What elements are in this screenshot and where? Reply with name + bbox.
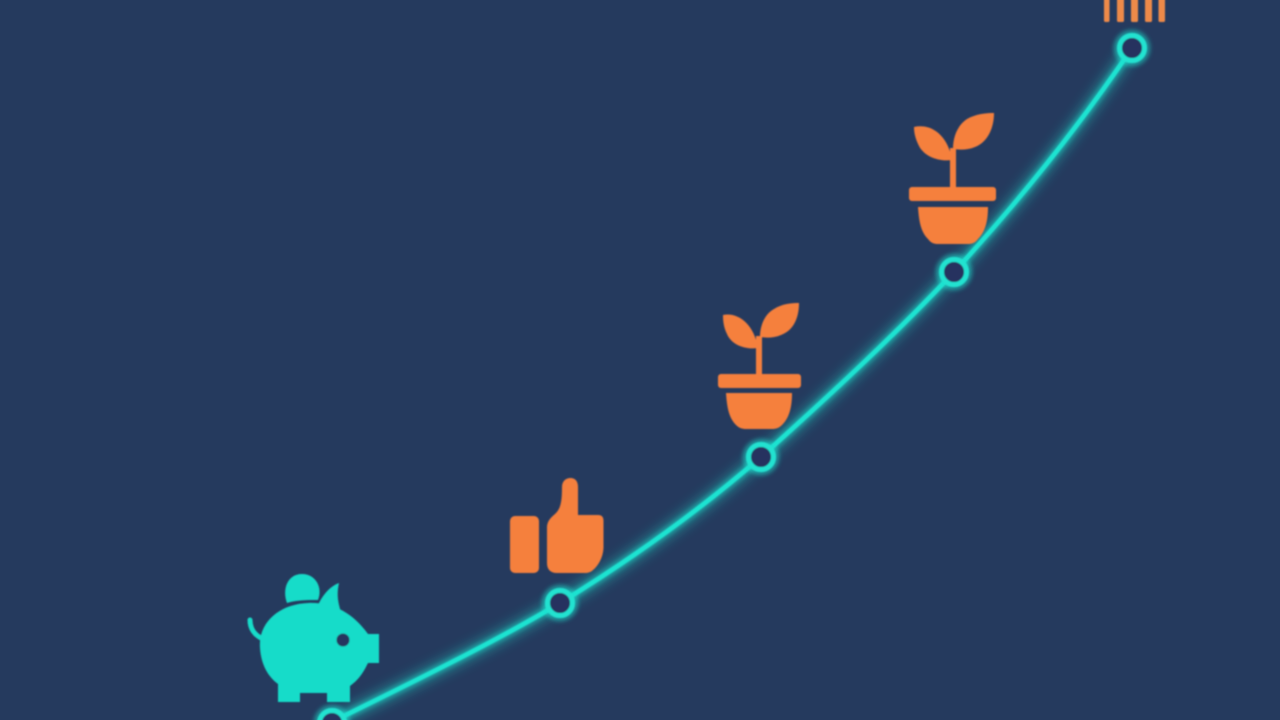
right leaf (760, 303, 799, 338)
pot body (726, 393, 792, 429)
right leaf (953, 113, 994, 150)
icon: thumbs up (510, 478, 604, 573)
body (260, 603, 379, 702)
pot rim (718, 374, 801, 388)
stem (756, 336, 762, 376)
tail (250, 620, 263, 639)
icon: piggy bank (250, 574, 379, 702)
icon: potted sprout large (909, 113, 996, 244)
ear (318, 583, 341, 612)
icon: potted sprout small (718, 303, 801, 429)
icon: cropped orange bars at top (1104, 0, 1165, 22)
pot body (918, 207, 988, 244)
left leaf (723, 315, 758, 348)
left leaf (914, 126, 952, 160)
coin (285, 574, 320, 603)
stem (950, 148, 956, 188)
curve nodes (319, 35, 1145, 720)
growth curve line (332, 48, 1132, 720)
eye (336, 634, 350, 646)
pot rim (909, 187, 996, 201)
